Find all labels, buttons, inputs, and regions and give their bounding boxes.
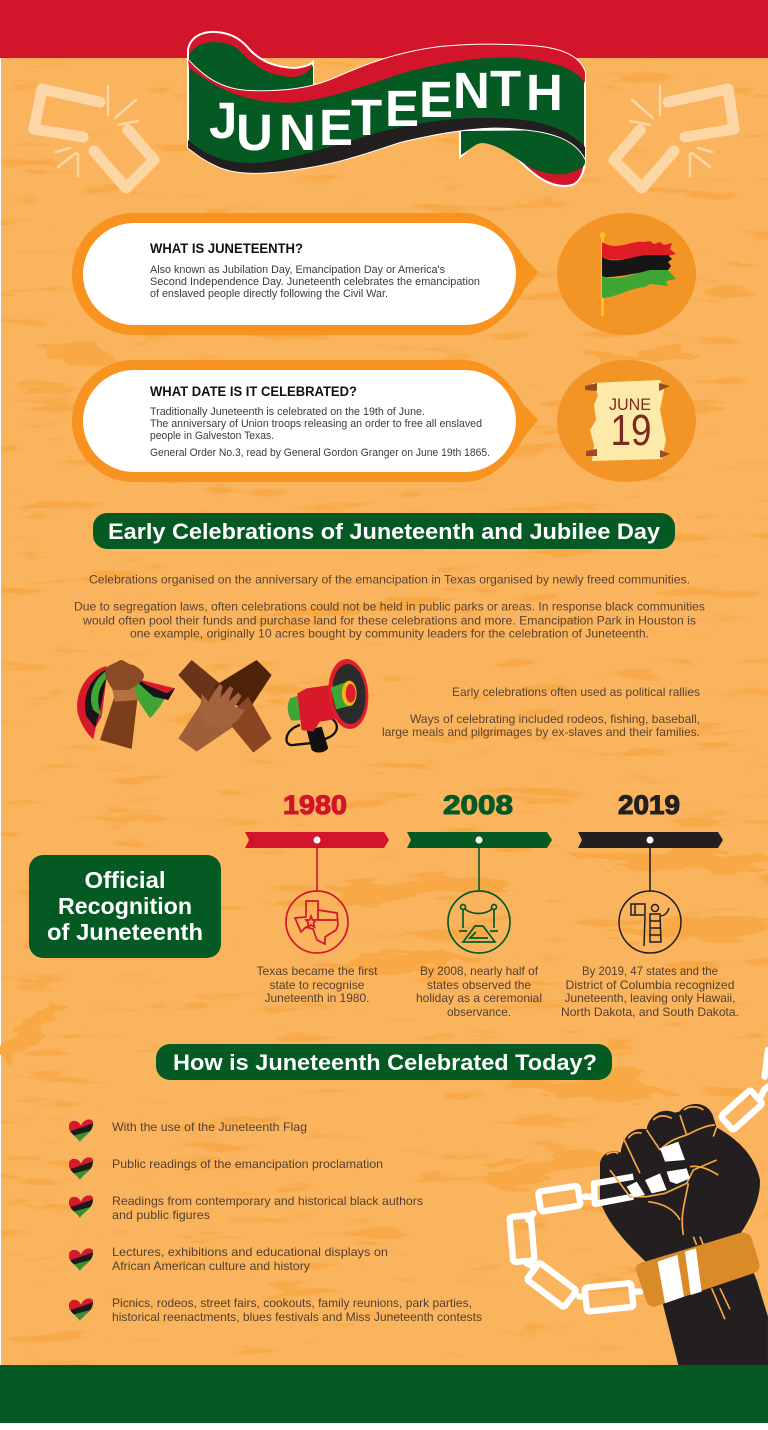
timeline bar xyxy=(407,832,552,848)
icon: heart bullet xyxy=(68,1117,94,1144)
text block: early rallies: Ways of celebrating included rodeos, fishing, baseball, xyxy=(410,712,700,726)
list item 5: Picnics, rodeos, street fairs, cookouts, family reunions, park parties, xyxy=(112,1296,472,1310)
caption: By 2019, 47 states and the xyxy=(582,964,718,978)
text block: early celebrations intro xyxy=(74,572,705,640)
panel: what date is it celebrated xyxy=(72,360,538,482)
ribbon right tab xyxy=(460,130,585,186)
chain xyxy=(509,1050,768,1312)
body text xyxy=(150,406,490,459)
body text: General Order No.3, read by General Gordon Granger on June 19th 1865. xyxy=(150,447,490,459)
panel: official recognition xyxy=(29,855,221,958)
heading: WHAT IS JUNETEENTH? xyxy=(150,241,303,256)
body text: Traditionally Juneteenth is celebrated on the 19th of June. xyxy=(150,406,425,418)
bottom green banner xyxy=(0,1365,768,1423)
list item 4: Lectures, exhibitions and educational displays on xyxy=(112,1245,388,1259)
heading: early celebrations: Early Celebrations of Juneteenth and Jubilee Day xyxy=(108,519,661,544)
body text: Second Independence Day. Juneteenth celebrates the emancipation xyxy=(150,276,480,288)
text block: early rallies: large meals and pilgrimages by ex-slaves and their families. xyxy=(382,725,700,739)
icon: calendar scroll xyxy=(557,360,696,482)
icon: liberty statue xyxy=(619,891,681,953)
illustration: fist breaking chain xyxy=(509,1050,768,1365)
caption: states observed the xyxy=(427,978,531,992)
year: 2008 xyxy=(443,790,513,820)
icon: heart bullet xyxy=(68,1193,94,1220)
icon: megaphone xyxy=(286,658,371,753)
text block: early celebrations intro: would often pool their funds and purchase land for these celebrations and more. Emancipation Park in Houston is xyxy=(82,614,696,628)
panel: official recognition: Official xyxy=(84,867,166,893)
panel: what is juneteenth xyxy=(72,213,538,335)
caption: observance. xyxy=(447,1005,511,1019)
caption: District of Columbia recognized xyxy=(566,978,734,992)
heading: early celebrations xyxy=(93,513,675,549)
icon: calendar scroll: JUNE xyxy=(609,395,651,414)
caption xyxy=(561,964,739,1019)
icon: calendar scroll: 19 xyxy=(610,406,652,455)
icon: broken chain left xyxy=(34,86,154,188)
icon: joined hands xyxy=(178,660,272,753)
panel: official recognition: Recognition xyxy=(58,893,192,919)
list: celebrations today xyxy=(68,1117,482,1324)
timeline bar xyxy=(245,832,389,848)
list item 5 xyxy=(112,1296,482,1324)
list item 4: African American culture and history xyxy=(112,1259,310,1273)
arm and fist xyxy=(600,1104,768,1365)
nails xyxy=(627,1142,690,1197)
caption: Juneteenth, leaving only Hawaii, xyxy=(564,991,736,1005)
caption: By 2008, nearly half of xyxy=(420,964,539,978)
year: 1980 xyxy=(283,790,347,820)
icon: texas xyxy=(286,891,348,953)
icon: flag circle xyxy=(557,213,696,335)
panel: official recognition: of Juneteenth xyxy=(47,919,203,945)
list item 3: and public figures xyxy=(112,1208,210,1222)
panel white pill xyxy=(83,370,516,472)
cuff xyxy=(636,1233,760,1307)
ribbon red stripe xyxy=(188,45,585,103)
caption xyxy=(256,964,378,1005)
body text: Also known as Jubilation Day, Emancipation Day or America's xyxy=(150,264,445,276)
panel pill outline xyxy=(72,213,538,335)
panel pill outline xyxy=(72,360,538,482)
ribbon black stripe xyxy=(188,118,585,173)
text block: early celebrations intro: Due to segregation laws, often celebrations could not be held in public parks or areas. In response black communities xyxy=(74,600,705,614)
title text: JUNETEENTH xyxy=(209,60,563,161)
caption: Juneteenth in 1980. xyxy=(264,991,370,1005)
ribbon main band xyxy=(188,45,585,173)
text block: early rallies xyxy=(382,685,700,739)
cuff stripes xyxy=(658,1248,702,1303)
ribbon left tab xyxy=(188,32,313,90)
timeline 1980 xyxy=(245,790,389,1005)
icon: heart bullet xyxy=(68,1296,94,1323)
caption: North Dakota, and South Dakota. xyxy=(561,1005,739,1019)
heading: celebrated today: How is Juneteenth Celebrated Today? xyxy=(173,1050,597,1075)
body text: The anniversary of Union troops releasing an order to free all enslaved xyxy=(150,418,482,430)
timeline bar xyxy=(578,832,723,848)
body text: of enslaved people directly following the Civil War. xyxy=(150,288,388,300)
icon: heart bullet xyxy=(68,1155,94,1182)
caption: state to recognise xyxy=(270,978,365,992)
icon: broken chain right xyxy=(614,86,734,188)
panel white pill xyxy=(83,223,516,325)
icon: rope barrier xyxy=(448,891,510,953)
body text xyxy=(150,264,480,300)
body text: people in Galveston Texas. xyxy=(150,430,274,442)
link across fist xyxy=(594,1177,633,1204)
heading: celebrated today xyxy=(156,1044,612,1080)
top red banner xyxy=(0,0,768,58)
timeline 2019 xyxy=(561,790,739,1019)
caption: Texas became the first xyxy=(256,964,378,978)
icon: heart bullet xyxy=(68,1246,94,1273)
list item 5: historical reenactments, blues festivals and Miss Juneteenth contests xyxy=(112,1310,482,1324)
text block: early celebrations intro: Celebrations organised on the anniversary of the emancipation in Texas organised by newly freed communities. xyxy=(89,572,690,586)
year: 2019 xyxy=(618,790,680,820)
caption xyxy=(416,964,542,1019)
text block: early celebrations intro: one example, originally 10 acres bought by community leaders for the celebration of Juneteenth. xyxy=(130,626,649,640)
icon: raised fist with flag xyxy=(77,660,175,749)
list item 3 xyxy=(112,1194,423,1222)
finger lines xyxy=(607,1107,730,1319)
heading: WHAT DATE IS IT CELEBRATED? xyxy=(150,384,357,399)
text block: early rallies: Early celebrations often used as political rallies xyxy=(452,685,700,699)
title ribbon xyxy=(188,32,585,186)
list item 3: Readings from contemporary and historical black authors xyxy=(112,1194,423,1208)
caption: holiday as a ceremonial xyxy=(416,991,542,1005)
list item 2: Public readings of the emancipation proclamation xyxy=(112,1157,383,1171)
timeline 2008 xyxy=(407,790,552,1019)
list item 4 xyxy=(112,1245,388,1273)
list item 1: With the use of the Juneteenth Flag xyxy=(112,1120,307,1134)
